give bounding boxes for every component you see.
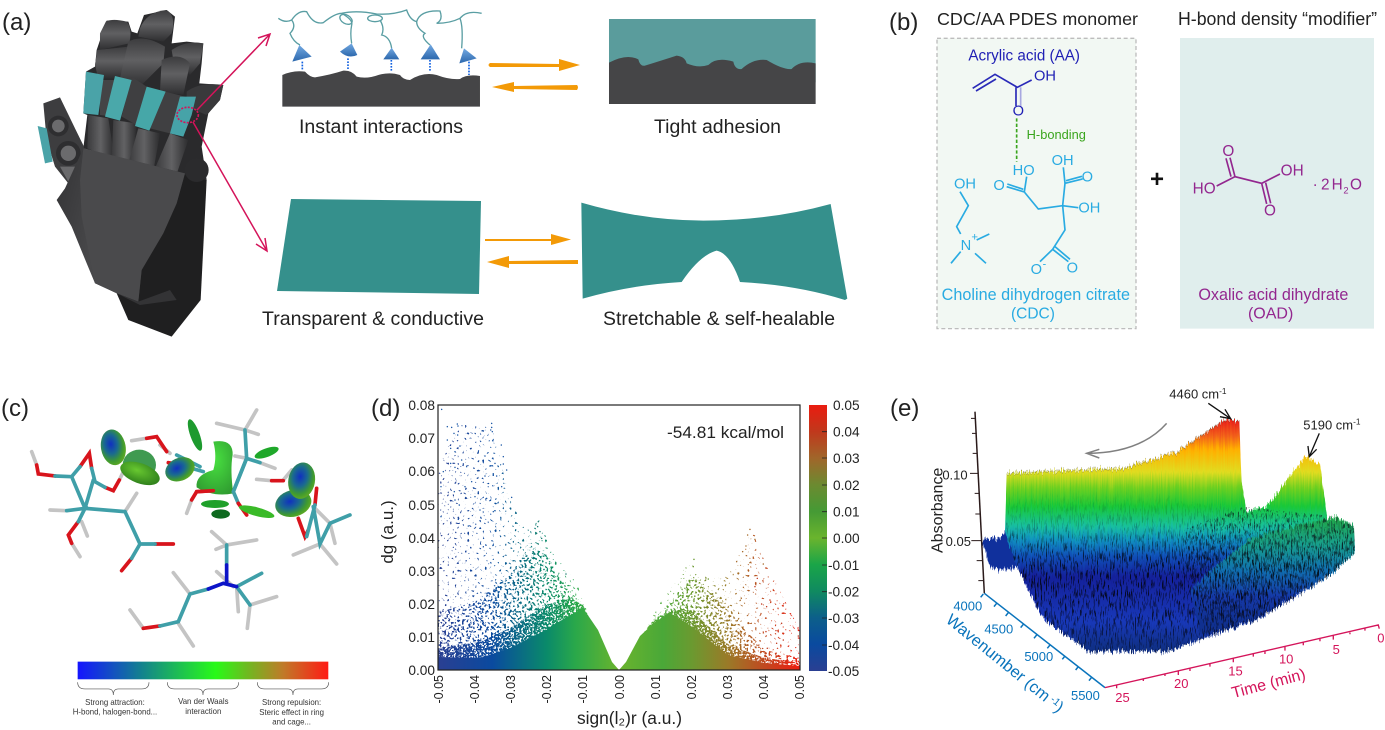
label: Tight adhesion: Tight adhesion — [654, 116, 781, 138]
panel label (b): (b) — [889, 9, 918, 36]
color bar with scale labels: -0.02 — [828, 584, 859, 600]
axis: absorbance — [930, 412, 984, 593]
panel label (c): (c) — [1, 395, 29, 422]
panel: oxalic acid dihydrate: HO — [1193, 180, 1216, 197]
panel label (a): (a) — [2, 9, 31, 36]
chart axes: x tick labels: 0.05 — [793, 675, 807, 699]
axis: wavenumber: ) — [1052, 699, 1067, 716]
color bar with scale labels: 0.01 — [833, 504, 860, 520]
panel: oxalic acid dihydrate: O — [1350, 176, 1362, 193]
axis: time: 20 — [1174, 676, 1188, 691]
diagram: instant interactions — [278, 10, 482, 107]
color bar with scale labels: -0.03 — [828, 611, 860, 626]
arrow: grey time direction arrow — [1087, 423, 1167, 458]
plus sign: + — [1150, 166, 1164, 193]
arrow: top orange equilibrium arrows — [488, 59, 580, 92]
color bar with scale labels: 0.03 — [833, 451, 860, 466]
label: Transparent &amp; conductive: Transparent & conductive — [262, 308, 484, 330]
axis: wavenumber: Wavenumber (cm — [942, 611, 1053, 705]
axis: wavenumber: 4500 — [984, 622, 1013, 637]
axis: absorbance: Absorbance — [930, 468, 947, 553]
panel: CDC/AA monomer structures: OH — [1052, 153, 1074, 169]
panel: CDC/AA monomer structures: OH — [1034, 69, 1056, 85]
panel label (e): (e) — [890, 395, 919, 422]
axis: wavenumber: 5500 — [1071, 688, 1100, 703]
callout: 5190 cm-1 peak: -1 — [1353, 417, 1361, 427]
chart axes: y tick labels: 0.05 — [408, 498, 435, 513]
panel: oxalic acid dihydrate: 2 — [1321, 176, 1330, 193]
axis: absorbance: 0.05 — [946, 534, 971, 549]
chart axes: y tick labels: 0.07 — [408, 431, 435, 446]
color scale: NCI interaction bar: Van der Waals — [178, 697, 229, 706]
color scale: NCI interaction bar — [73, 662, 329, 726]
panel: oxalic acid dihydrate: · — [1313, 176, 1318, 193]
chart axes: x tick labels: -0.01 — [576, 675, 590, 704]
y axis title: dg (a.u.) — [378, 500, 397, 564]
chart axes: y tick labels: 0.00 — [408, 663, 435, 678]
panel: CDC/AA monomer structures: N — [961, 238, 971, 254]
panel: CDC/AA monomer structures: O — [993, 178, 1005, 194]
panel: oxalic acid dihydrate: OH — [1281, 163, 1304, 180]
panel: CDC/AA monomer structures — [937, 38, 1136, 329]
heading: H-bond density modifier: H-bond density “modifier” — [1178, 9, 1377, 29]
panel: oxalic acid dihydrate: H — [1332, 176, 1343, 193]
chart axes: x tick labels: -0.04 — [468, 675, 482, 704]
color bar with scale labels: 0.05 — [833, 398, 860, 413]
axis: time: 0 — [1377, 631, 1385, 646]
chart axes: x tick labels: 0.03 — [721, 675, 735, 699]
callout: 5190 cm-1 peak: 5190 cm — [1303, 417, 1353, 432]
chart axes: x tick labels: -0.02 — [540, 675, 554, 704]
axis: time: 25 — [1115, 690, 1130, 705]
callout: 4460 cm-1 peak: 4460 cm — [1169, 387, 1219, 402]
icon: robotic hand with teal sensor patches — [38, 10, 223, 337]
chart axes: y tick labels: 0.08 — [408, 398, 435, 413]
panel: CDC/AA monomer structures: O — [1031, 262, 1042, 278]
chart axes: y tick labels: 0.03 — [408, 564, 435, 579]
axis: wavenumber: 5000 — [1024, 649, 1053, 664]
axis: time: Time (min) — [1230, 666, 1308, 702]
callout: 5190 cm-1 peak — [1303, 417, 1361, 457]
color bar with scale labels: 0.04 — [833, 424, 860, 440]
color scale: NCI interaction bar: and cage... — [272, 717, 311, 726]
label: Stretchable &amp; self-healable: Stretchable & self-healable — [603, 308, 835, 330]
chart axes: x tick labels: 0.04 — [757, 675, 771, 699]
heading: CDC/AA PDES monomer: CDC/AA PDES monomer — [937, 9, 1138, 29]
panel: oxalic acid dihydrate: O — [1264, 202, 1276, 219]
color bar with scale labels: 0.00 — [833, 531, 860, 546]
axis: wavenumber: -1 — [1046, 693, 1062, 709]
color bar with scale labels: -0.01 — [828, 558, 859, 573]
chart: 3D FTIR absorbance surface — [982, 420, 1355, 652]
axis: absorbance: 0.10 — [942, 467, 968, 482]
panel: CDC/AA monomer structures: - — [1043, 258, 1047, 270]
panel: CDC/AA monomer structures: Choline dihydrogen citrate — [942, 286, 1130, 304]
panel: oxalic acid dihydrate: Oxalic acid dihydrate — [1198, 286, 1348, 304]
chart axes: x tick labels: -0.03 — [504, 675, 518, 704]
chart axes: y tick labels: 0.02 — [408, 597, 435, 612]
energy annotation: -54.81 kcal/mol — [667, 423, 784, 442]
chart axes: y tick labels: 0.01 — [408, 630, 435, 645]
callout: 4460 cm-1 peak: -1 — [1219, 386, 1227, 396]
color bar with scale labels — [809, 398, 860, 679]
arrow: lower orange equilibrium arrows — [485, 234, 578, 268]
panel: CDC/AA monomer structures: (CDC) — [1011, 305, 1055, 322]
panel: oxalic acid dihydrate: O — [1222, 143, 1234, 160]
panel: CDC/AA monomer structures: OH — [1078, 201, 1100, 217]
color bar with scale labels: -0.05 — [828, 664, 860, 679]
axis: time — [1105, 625, 1385, 705]
panel: CDC/AA monomer structures: HO — [1013, 163, 1035, 179]
panel: oxalic acid dihydrate — [1180, 38, 1374, 329]
axis: time: 15 — [1228, 663, 1243, 678]
color scale: NCI interaction bar: Strong attraction: — [85, 698, 145, 707]
color bar with scale labels: -0.04 — [828, 638, 860, 653]
panel: oxalic acid dihydrate: 2 — [1343, 185, 1349, 195]
shape: stretched self-healing sheet — [581, 203, 847, 300]
diagram: tight adhesion — [609, 19, 816, 104]
panel label (d): (d) — [371, 395, 400, 422]
callout: 4460 cm-1 peak — [1169, 386, 1231, 419]
chart axes: y tick labels: 0.04 — [408, 531, 435, 546]
chart axes: y tick labels: 0.06 — [408, 464, 435, 479]
panel: NCI molecular model — [32, 410, 350, 646]
color scale: NCI interaction bar: Steric effect in ring — [259, 708, 324, 717]
chart: RDG scatter plot — [438, 405, 800, 670]
chart axes: x tick labels: 0.02 — [685, 675, 699, 699]
panel: CDC/AA monomer structures: OH — [954, 177, 976, 193]
panel: oxalic acid dihydrate: (OAD) — [1248, 305, 1293, 322]
axis: time: 10 — [1279, 651, 1293, 666]
color bar with scale labels: 0.02 — [833, 478, 860, 493]
axis: wavenumber: 4000 — [953, 599, 982, 614]
axis: wavenumber — [942, 593, 1105, 716]
panel: CDC/AA monomer structures: Acrylic acid (AA) — [968, 48, 1080, 65]
chart axes: x tick labels: -0.05 — [432, 675, 446, 704]
panel: CDC/AA monomer structures: O — [1067, 260, 1078, 276]
arrow: upper pink callout arrow — [197, 34, 270, 110]
chart axes: x tick labels: 0.01 — [649, 675, 663, 699]
axis: time: 5 — [1333, 642, 1340, 657]
panel: CDC/AA monomer structures: O — [1082, 170, 1093, 186]
chart axes: y tick labels — [408, 398, 435, 678]
color scale: NCI interaction bar: H-bond, halogen-bond... — [73, 708, 157, 717]
chart axes: x tick labels: 0.00 — [613, 675, 627, 699]
arrow: lower pink callout arrow — [193, 122, 267, 251]
color scale: NCI interaction bar: Strong repulsion: — [262, 698, 321, 707]
color scale: NCI interaction bar: interaction — [185, 707, 221, 716]
chart axes: x tick labels — [432, 675, 807, 704]
shape: transparent conductive sheet — [277, 199, 481, 294]
panel: CDC/AA monomer structures: + — [971, 232, 978, 244]
panel: CDC/AA monomer structures: O — [1013, 104, 1024, 120]
label: Instant interactions: Instant interactions — [299, 116, 463, 138]
x axis title: sign(l₂)r (a.u.) — [577, 708, 682, 728]
panel: CDC/AA monomer structures: H-bonding — [1027, 127, 1086, 142]
